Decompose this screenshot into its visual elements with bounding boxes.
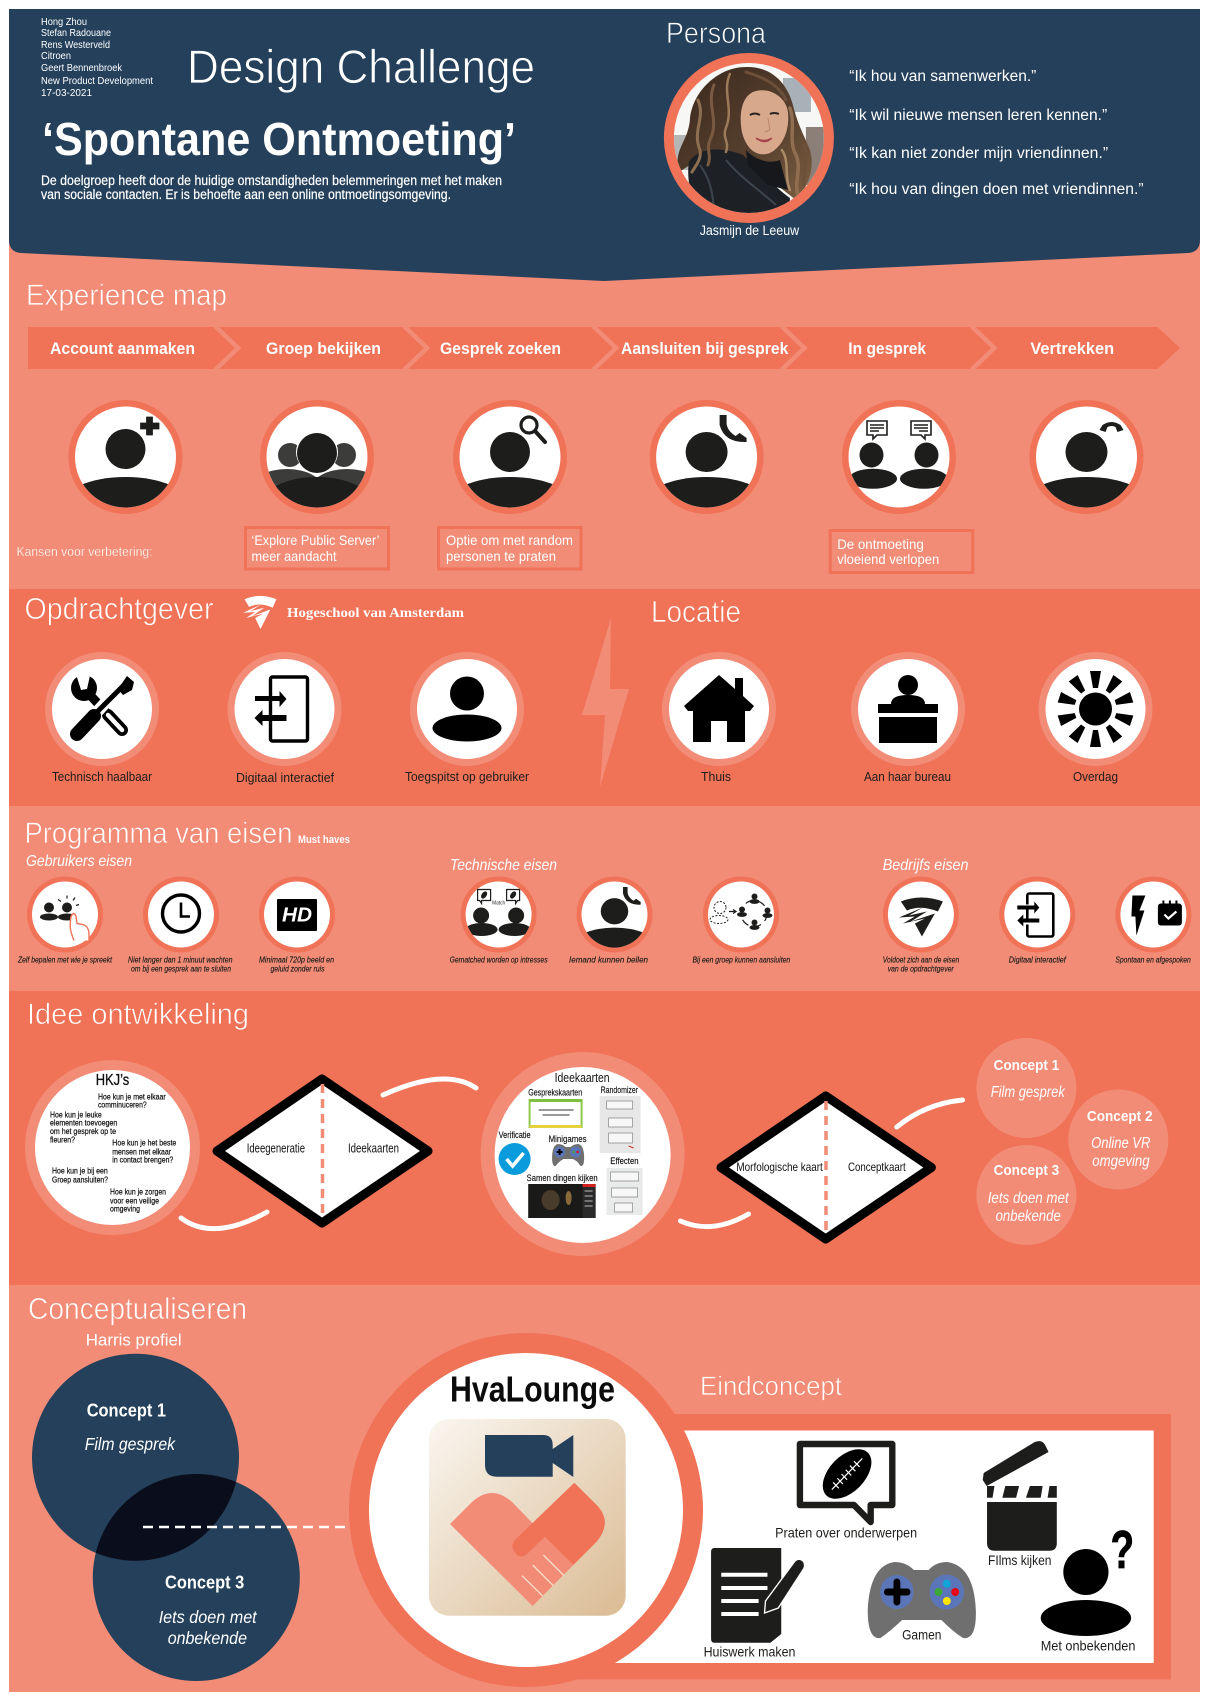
icon: hva logo [883, 876, 959, 952]
logo: hogeschool van amsterdam [243, 596, 464, 629]
icon: gematched [461, 876, 537, 952]
icon: gamen [868, 1562, 976, 1642]
team credits: Stefan Radouane [41, 27, 111, 39]
icon: gamen: Gamen [902, 1627, 941, 1642]
heading: eindconcept: Eindconcept [700, 1371, 842, 1401]
heading: programma van eisen: Programma van eisen [24, 817, 292, 850]
bubble: concept 1: Film gesprek [991, 1084, 1066, 1101]
icon: films kijken [983, 1441, 1057, 1568]
icon: huiswerk maken [704, 1548, 805, 1660]
process arrow: journey steps [28, 326, 1180, 370]
bubble: hkj's: mensen met elkaar [112, 1146, 171, 1156]
callout: de ontmoeting: De ontmoeting [837, 536, 924, 552]
heading: experience map: Experience map [26, 279, 227, 312]
label: digitaal interactief: Digitaal interactief [236, 770, 334, 785]
bubble: hkj's: Hoe kun je zorgen [110, 1187, 166, 1197]
icon: groep aansluiten [703, 876, 779, 952]
callout: optie om met random: personen te praten [446, 548, 556, 564]
label: niet langer: Niet langer dan 1 minuut wachten [128, 956, 233, 965]
bubble: hkj's: Hoe kun je met elkaar [98, 1091, 166, 1101]
icon: huiswerk maken: Huiswerk maken [704, 1645, 795, 1660]
icon: met onbekenden [1041, 1521, 1135, 1654]
icon: digitaal interactief [228, 652, 342, 766]
icon: in gesprek [842, 400, 956, 514]
arrow: curve diamond to concepts [897, 1100, 962, 1127]
bubble: concept 2: Online VR [1091, 1135, 1150, 1152]
process arrow: journey steps: In gesprek [848, 339, 927, 358]
diamond: ideegeneratie ideekaarten: Ideegeneratie [247, 1142, 305, 1156]
diamond: morfologische kaart conceptkaart: Morfologische kaart [736, 1160, 823, 1174]
process arrow: journey steps: Account aanmaken [50, 339, 195, 358]
icon: met onbekenden: ? [1110, 1521, 1134, 1580]
icon: spontaan en afgesproken [1115, 876, 1191, 952]
image: samen dingen kijken [527, 1173, 598, 1218]
diamond: ideegeneratie ideekaarten: Ideekaarten [348, 1142, 399, 1156]
callout: explore public server [246, 528, 388, 569]
panel: header [9, 9, 1200, 281]
icon: films kijken: FIlms kijken [988, 1553, 1052, 1568]
bubble: concept 1 [976, 1038, 1076, 1138]
icon: toegespitst op gebruiker [410, 652, 524, 766]
label: voldoet: van de opdrachtgever [888, 965, 954, 974]
arrow: curve ideekaarten to diamond [680, 1214, 749, 1227]
venn diagram: harris profiel: onbekende [168, 1628, 247, 1648]
icon: overdag [1038, 652, 1152, 766]
bubble: hkj's: Groep aansluiten? [52, 1175, 108, 1185]
label: technisch haalbaar: Technisch haalbaar [52, 769, 153, 784]
persona quotes: “Ik hou van dingen doen met vriendinnen.” [849, 181, 1144, 198]
card: gesprekskaarten [528, 1088, 582, 1128]
icon: bellen [576, 876, 652, 952]
bubble: hkj's: om het gesprek op te [50, 1126, 116, 1136]
title: design challenge: Design Challenge [187, 40, 535, 93]
process arrow: journey steps: Aansluiten bij gesprek [621, 339, 789, 358]
subheading: bedrijfs eisen: Bedrijfs eisen [883, 857, 968, 874]
bubble: hkj's: elementen toevoegen [50, 1118, 117, 1128]
arrow: dashed line to hvalounge [143, 1526, 352, 1528]
label: bij een groep: Bij een groep kunnen aansluiten [692, 956, 791, 965]
bubble: concept 3 [976, 1145, 1076, 1245]
bubble: hkj's: voor een veilige [110, 1196, 159, 1206]
bubble: concept 3: onbekende [996, 1208, 1061, 1225]
icon: klok [143, 876, 219, 952]
label: overdag: Overdag [1073, 769, 1118, 784]
label: niet langer [128, 956, 233, 974]
icon: minigames: Minigames [549, 1134, 587, 1145]
icon: gematched: Match [492, 900, 505, 906]
label: zelf bepalen: Zelf bepalen met wie je spreekt [17, 956, 113, 965]
label: digitaal interactief klein: Digitaal interactief [1009, 956, 1066, 965]
venn diagram: harris profiel: Film gesprek [85, 1434, 176, 1454]
label: toegspitst op gebruiker: Toegspitst op gebruiker [405, 769, 530, 784]
label: minimaal 720p: Minimaal 720p beeld en [259, 956, 334, 965]
subheading: technische eisen: Technische eisen [450, 857, 557, 874]
panel: idee ontwikkeling background [9, 991, 1200, 1285]
persona portrait [664, 53, 834, 225]
panel: experience map background [9, 225, 1200, 589]
label: kansen voor verbetering: Kansen voor verbetering: [16, 544, 152, 559]
icon: app logo [429, 1419, 626, 1616]
label: gematched: Gematched worden op intresses [450, 956, 548, 965]
venn diagram: harris profiel: Concept 3 [165, 1572, 244, 1592]
bubble: concept 3: Iets doen met [988, 1190, 1069, 1207]
team credits [41, 16, 153, 99]
logo: hogeschool van amsterdam: Hogeschool van Amsterdam [287, 606, 464, 621]
bubble: hkj's: in contact brengen? [112, 1155, 173, 1165]
panel: hvalounge circle [349, 1333, 703, 1687]
label: aan haar bureau: Aan haar bureau [864, 769, 951, 784]
icon: verificatie [499, 1130, 531, 1175]
panel: programma van eisen background [9, 806, 1200, 991]
icon: hd: HD [282, 904, 312, 926]
icon: digitaal interactief klein [999, 876, 1075, 952]
process arrow: journey steps: Gesprek zoeken [440, 339, 561, 358]
icon: lightning divider [582, 618, 629, 787]
label: spontaan en afgespoken: Spontaan en afgespoken [1115, 956, 1191, 965]
venn diagram: harris profiel: Concept 1 [87, 1401, 166, 1421]
card: effecten [607, 1156, 643, 1215]
bubble: hkj's [25, 1060, 200, 1235]
persona quotes [849, 68, 1144, 198]
venn diagram: harris profiel: Iets doen met [159, 1607, 258, 1627]
bubble: ideekaarten [481, 1052, 685, 1256]
card: effecten: Effecten [610, 1156, 639, 1167]
panel: eindconcept frame [570, 1414, 1171, 1680]
team credits: Rens Westerveld [41, 39, 110, 51]
icon: vertrekken [1030, 400, 1144, 514]
label: niet langer: om bij een gesprek aan te sluiten [131, 965, 231, 974]
callout: de ontmoeting: vloeiend verlopen [837, 551, 939, 567]
bubble: hkj's: comminuceren? [98, 1100, 147, 1110]
diamond: morfologische kaart conceptkaart: Conceptkaart [848, 1160, 906, 1174]
persona quotes: “Ik hou van samenwerken.” [849, 68, 1036, 85]
label: thuis: Thuis [701, 769, 731, 784]
title: spontane ontmoeting: ‘Spontane Ontmoeting’ [42, 113, 516, 165]
persona quotes: “Ik wil nieuwe mensen leren kennen.” [849, 107, 1107, 124]
label: voldoet: Voldoet zich aan de eisen [883, 956, 960, 965]
bubble: hkj's: fleuren? [50, 1134, 75, 1144]
bubble: ideekaarten: Ideekaarten [555, 1070, 610, 1085]
subheading: gebruikers eisen: Gebruikers eisen [26, 853, 132, 870]
persona name: Jasmijn de Leeuw [700, 223, 799, 238]
heading: idee ontwikkeling: Idee ontwikkeling [27, 998, 249, 1031]
heading: locatie: Locatie [651, 594, 741, 629]
callout: optie om met random: Optie om met random [446, 532, 573, 548]
icon: zelf bepalen [27, 876, 103, 952]
description [41, 173, 502, 202]
process arrow: journey steps: Vertrekken [1030, 339, 1114, 358]
card: randomizer: Randomizer [601, 1085, 638, 1095]
bubble: hkj's: HKJ’s [96, 1072, 129, 1089]
bubble: concept 3: Concept 3 [994, 1162, 1059, 1179]
label: must haves: Must haves [298, 834, 350, 846]
heading: opdrachtgever: Opdrachtgever [24, 591, 214, 626]
arrow: curve hkj to diamond [181, 1212, 267, 1229]
label: iemand bellen: Iemand kunnen bellen [569, 956, 649, 965]
icon: groep bekijken [260, 400, 374, 514]
bubble: hkj's: Hoe kun je het beste [112, 1138, 176, 1148]
card: randomizer [600, 1085, 641, 1153]
panel: opdrachtgever background [9, 589, 1200, 806]
callout: explore public server: meer aandacht [252, 548, 337, 564]
icon: praten over onderwerpen [775, 1440, 917, 1541]
team credits: New Product Development [41, 75, 153, 87]
callout: explore public server: ‘Explore Public Server’ [252, 532, 380, 548]
callout: optie om met random [438, 528, 581, 569]
description: van sociale contacten. Er is behoefte aan een online ontmoetingsomgeving. [41, 187, 451, 202]
icon: technisch haalbaar [45, 652, 159, 766]
bubble: hkj's: omgeving [110, 1204, 140, 1214]
icon: aan haar bureau [851, 652, 965, 766]
heading: persona: Persona [666, 17, 766, 50]
bubble: hkj's: Hoe kun je leuke [50, 1110, 102, 1120]
icon: thuis [662, 652, 776, 766]
venn diagram: harris profiel [32, 1354, 300, 1681]
team credits: Geert Bennenbroek [41, 62, 123, 74]
bubble: concept 2: omgeving [1092, 1153, 1150, 1170]
image: samen dingen kijken: Samen dingen kijken [527, 1173, 598, 1184]
icon: account aanmaken [68, 400, 182, 514]
bubble: hkj's: Hoe kun je bij een [52, 1165, 108, 1175]
icon: verificatie: Verificatie [499, 1130, 531, 1140]
team credits: 17-03-2021 [41, 87, 92, 99]
diamond: morfologische kaart conceptkaart [721, 1096, 931, 1239]
bubble: concept 1: Concept 1 [994, 1057, 1059, 1074]
process arrow: journey steps: Groep bekijken [266, 339, 381, 358]
arrow: curve diamond to ideekaarten [383, 1079, 476, 1095]
icon: met onbekenden: Met onbekenden [1041, 1639, 1135, 1654]
description: De doelgroep heeft door de huidige omstandigheden belemmeringen met het maken [41, 173, 502, 188]
card: gesprekskaarten: Gesprekskaarten [528, 1088, 582, 1099]
bubble: concept 2 [1068, 1090, 1168, 1190]
label: voldoet [883, 956, 960, 974]
team credits: Hong Zhou [41, 16, 87, 28]
diamond: ideegeneratie ideekaarten [217, 1079, 428, 1223]
icon: aansluiten bij gesprek [650, 400, 764, 514]
icon: praten over onderwerpen: Praten over onderwerpen [775, 1526, 917, 1541]
panel: conceptualiseren background [9, 1285, 1200, 1692]
heading: conceptualiseren: Conceptualiseren [28, 1291, 247, 1326]
bubble: concept 2: Concept 2 [1087, 1108, 1152, 1125]
team credits: Citroen [41, 50, 71, 62]
icon: minigames [549, 1134, 587, 1166]
label: minimaal 720p: geluid zonder ruis [270, 965, 324, 974]
icon: hd [259, 876, 335, 952]
persona quotes: “Ik kan niet zonder mijn vriendinnen.” [849, 145, 1108, 162]
callout: de ontmoeting [830, 530, 973, 572]
label: harris profiel: Harris profiel [86, 1331, 182, 1350]
icon: gesprek zoeken [453, 400, 567, 514]
label: minimaal 720p [259, 956, 334, 974]
title: hvalounge: HvaLounge [450, 1369, 615, 1410]
